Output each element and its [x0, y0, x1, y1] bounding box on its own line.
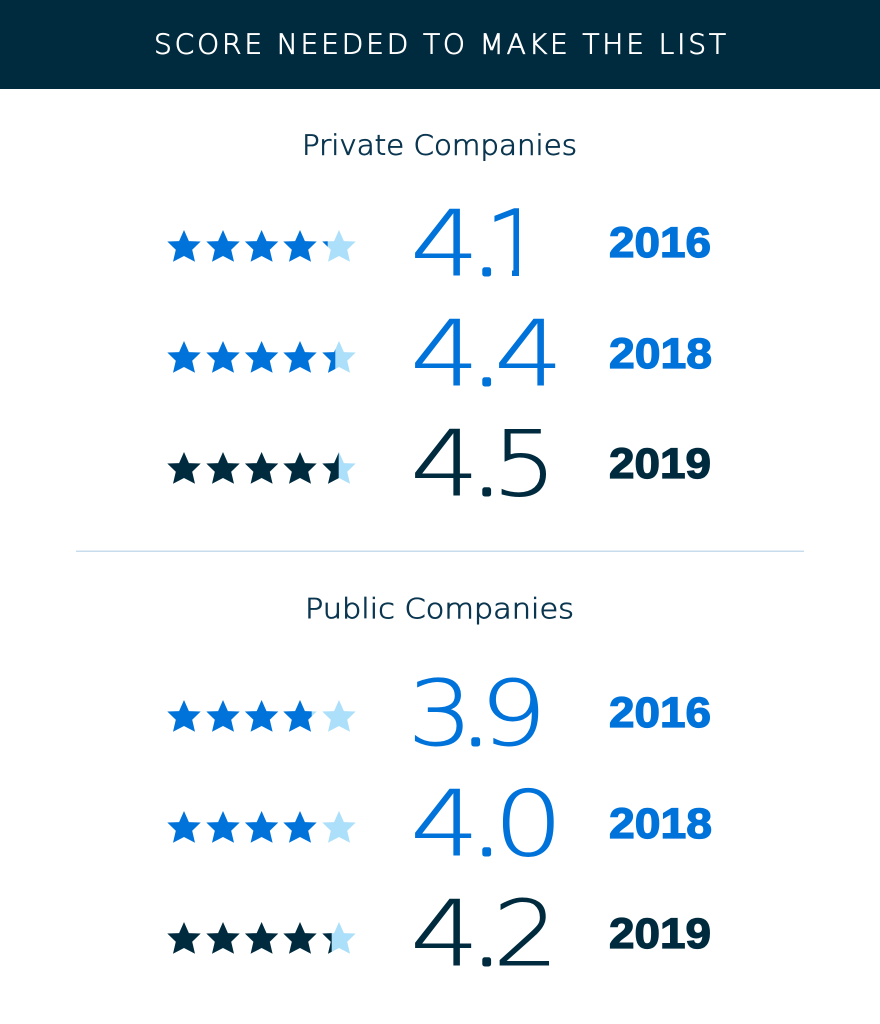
- score: 4.0: [410, 771, 563, 877]
- score: 4.1: 1: [485, 191, 545, 296]
- score: 4.2: 4: [410, 881, 479, 987]
- score: 3.9: .: [470, 709, 481, 753]
- score: 4.4: 4: [410, 301, 479, 407]
- year: 2018: 2018: [609, 330, 712, 378]
- score: 4.1: [415, 208, 519, 276]
- score: 4.1: 4: [410, 191, 479, 297]
- stars: 3.9: [167, 700, 356, 732]
- row: private 2019: [167, 428, 710, 497]
- year: 2019: 2019: [609, 910, 711, 958]
- score: 4.5: .: [481, 459, 492, 503]
- score: 3.9: [408, 660, 547, 767]
- score: 4.2: 2: [493, 881, 559, 986]
- row: private 2016: [167, 208, 710, 276]
- heading: public companies: Public Companies: [305, 593, 574, 625]
- score: 4.0: 0: [494, 771, 563, 877]
- score: 4.1: .: [481, 239, 492, 283]
- score: 4.2: [410, 881, 559, 987]
- score: 4.5: [410, 411, 557, 517]
- panel: public companies: [167, 593, 712, 987]
- score: 4.4: 4: [494, 301, 563, 407]
- score: 4.2: .: [481, 929, 492, 973]
- stars: 4.4: [167, 341, 356, 373]
- year: 2016: 2016: [609, 219, 711, 267]
- score: 4.4: [410, 301, 563, 407]
- panel: private companies: [167, 129, 712, 517]
- year: 2018: 2018: [609, 800, 712, 848]
- heading: private companies: Private Companies: [302, 129, 577, 161]
- header band: [0, 0, 880, 89]
- row: private 2018: [167, 318, 712, 386]
- stars: 4.1: [167, 230, 356, 262]
- score: 4.0: 4: [410, 771, 479, 877]
- score: 4.5: 4: [410, 411, 479, 517]
- score: 3.9: 3: [408, 660, 473, 766]
- score: 4.4: .: [481, 349, 492, 393]
- score: 3.9: 9: [480, 662, 547, 767]
- title: SCORE NEEDED TO MAKE THE LIST: [154, 27, 726, 60]
- score: 4.5: 5: [492, 411, 557, 517]
- stars: 4.2: [167, 922, 356, 954]
- row: public 2016: [167, 677, 710, 746]
- stars: 4.5: [167, 452, 356, 484]
- row: public 2018: [167, 771, 712, 877]
- year: 2019: 2019: [609, 440, 711, 488]
- stars: 4.0: [167, 811, 356, 843]
- year: 2016: 2016: [609, 689, 711, 737]
- row: public 2019: [167, 898, 710, 966]
- score: 4.0: .: [481, 819, 492, 863]
